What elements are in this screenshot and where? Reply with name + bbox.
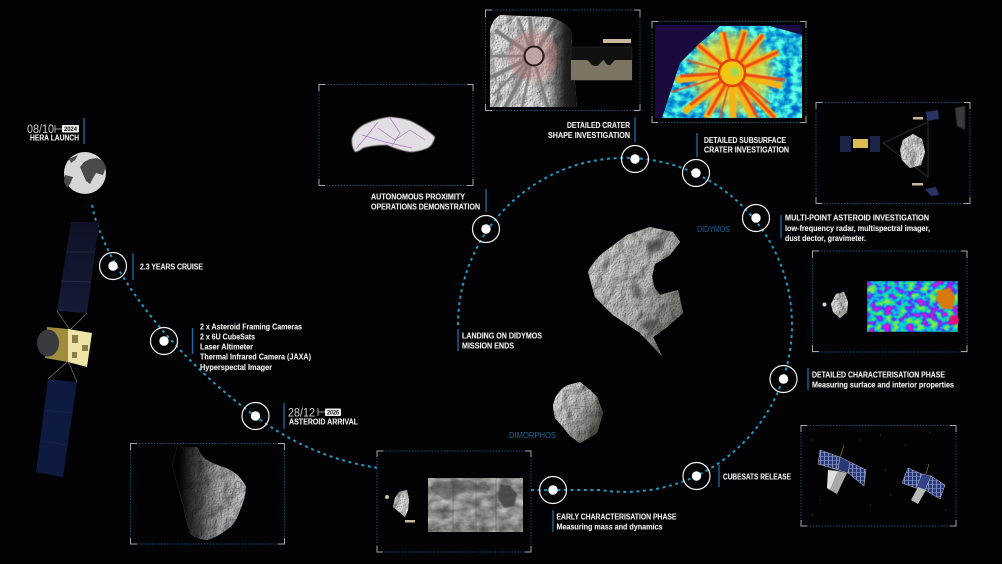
label: Hera launch xyxy=(27,118,84,144)
label: landing on Didymos xyxy=(458,329,543,351)
label: instruments list: Laser Altimeter xyxy=(200,342,253,352)
node: autonomous proximity xyxy=(472,216,500,242)
label: DIMORPHOS: DIMORPHOS xyxy=(509,430,556,440)
label: autonomous proximity: OPERATIONS DEMONSTRATION xyxy=(371,202,480,212)
node: instruments xyxy=(150,328,178,354)
label: Hera launch: 08/10 xyxy=(27,124,54,136)
label: DIDYMOS: DIDYMOS xyxy=(697,224,730,234)
icon: Earth xyxy=(64,152,106,194)
label: multi-point: dust dector, gravimeter. xyxy=(785,234,866,243)
label: cruise xyxy=(133,253,204,280)
spacecraft: Hera xyxy=(36,222,99,477)
label: multi-point: MULTI-POINT ASTEROID INVESTIGATION xyxy=(785,214,929,222)
label: cubesats release xyxy=(719,465,792,487)
label: crater shape: SHAPE INVESTIGATION xyxy=(548,131,630,140)
panel: early characterisation image xyxy=(377,451,531,552)
label: cruise: 2.3 YEARS CRUISE xyxy=(140,262,204,272)
label: Hera launch: HERA LAUNCH xyxy=(30,134,79,142)
panel: detailed characterisation image xyxy=(812,251,967,352)
mission trajectory xyxy=(92,158,792,492)
label: instruments list: 2 x 6U CubeSats xyxy=(200,332,255,342)
label: detailed characterisation xyxy=(808,368,954,390)
label: detailed characterisation: DETAILED CHARACTERISATION PHASE xyxy=(812,370,946,380)
label: asteroid arrival xyxy=(284,403,358,429)
node: detailed characterisation xyxy=(770,366,797,392)
panel: asteroid arrival image xyxy=(130,444,284,544)
asteroid: Dimorphos xyxy=(553,382,603,443)
label: landing on Didymos: MISSION ENDS xyxy=(462,342,515,350)
label: instruments list: 2 x Asteroid Framing Cameras xyxy=(200,322,302,332)
label: early characterisation xyxy=(553,510,677,532)
panel: autonomous proximity image xyxy=(319,84,473,186)
node: crater shape xyxy=(622,146,648,172)
label: instruments list xyxy=(192,322,311,372)
label: crater shape: DETAILED CRATER xyxy=(567,121,630,130)
label: autonomous proximity xyxy=(371,189,486,212)
label: early characterisation: EARLY CHARACTERISATION PHASE xyxy=(556,512,677,522)
label: multi-point xyxy=(781,214,930,243)
node: cubesats release xyxy=(683,462,710,490)
label: detailed characterisation: Measuring surface and interior properties xyxy=(812,380,954,390)
label: crater shape xyxy=(548,117,635,142)
node: arrival xyxy=(242,402,269,430)
label: instruments list: Hyperspectal Imager xyxy=(200,363,272,372)
asteroid: Didymos xyxy=(588,227,683,356)
label: multi-point: low-frequency radar, multispectral imager, xyxy=(785,224,930,233)
node: subsurface xyxy=(682,160,710,186)
label: asteroid arrival: 2026 xyxy=(327,410,340,416)
label: subsurface: CRATER INVESTIGATION xyxy=(704,146,789,154)
panel: multi-point image xyxy=(816,102,970,204)
node: multi-point xyxy=(742,204,770,232)
panel: crater shape image xyxy=(486,10,640,110)
panel: cubesats image xyxy=(801,426,956,526)
label: subsurface: DETAILED SUBSURFACE xyxy=(704,136,787,145)
label: asteroid arrival: 28/12 xyxy=(288,408,315,420)
panel: subsurface image xyxy=(652,22,806,122)
label: landing on Didymos: LANDING ON DIDYMOS xyxy=(462,332,543,340)
label: subsurface xyxy=(697,133,789,157)
node: early characterisation xyxy=(540,476,566,504)
label: cubesats release: CUBESATS RELEASE xyxy=(723,472,792,482)
label: instruments list: Thermal Infrared Camera (JAXA) xyxy=(200,352,311,362)
label: asteroid arrival: ASTEROID ARRIVAL xyxy=(289,418,358,426)
label: early characterisation: Measuring mass and dynamics xyxy=(556,522,663,532)
label: autonomous proximity: AUTONOMOUS PROXIMITY xyxy=(371,192,466,202)
label: Hera launch: 2024 xyxy=(64,127,78,133)
node: cruise xyxy=(100,252,126,280)
